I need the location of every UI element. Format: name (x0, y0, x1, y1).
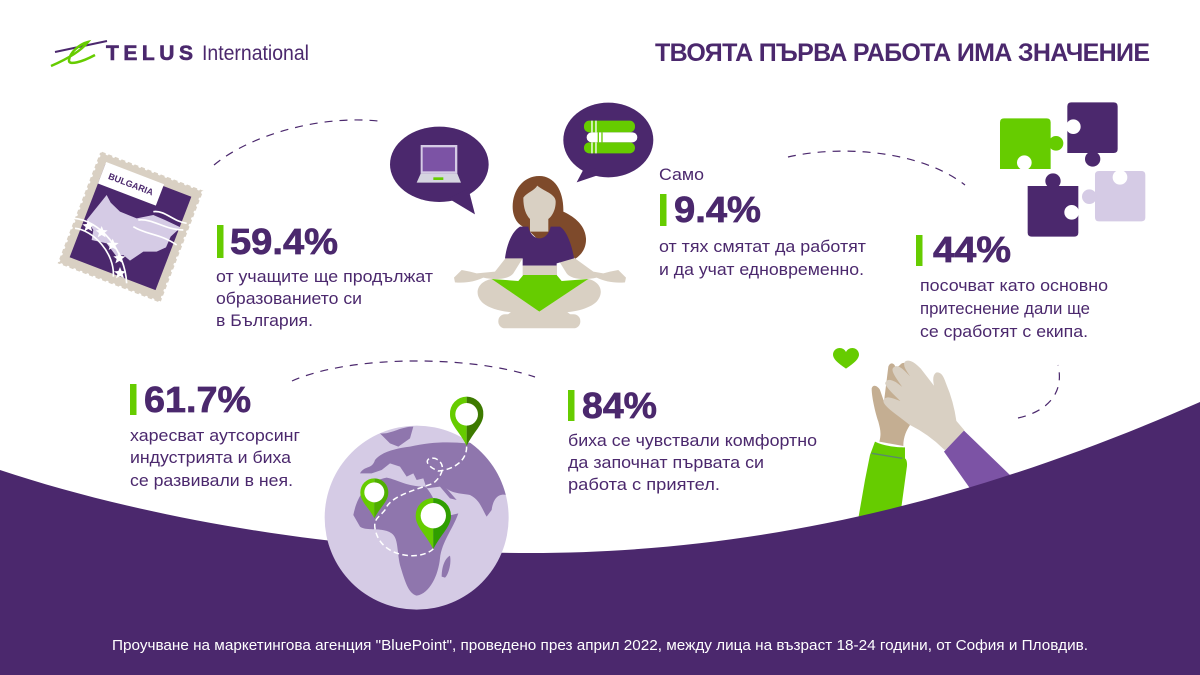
dark piece top (1067, 102, 1118, 167)
dashed connector: stamp to woman (214, 120, 378, 165)
stat: 84%: биха се чувствали комфортно (568, 431, 817, 450)
icon: Bulgaria postage stamp (58, 151, 203, 303)
stat: 9.4% (659, 165, 866, 279)
footer source note: Проучване на маркетингова агенция "BluePoint", проведено през април 2022, между лица на възраст 18-24 години, от София и Пловдив. (112, 638, 1088, 654)
stat: 61.7%: харесват аутсорсинг (130, 426, 300, 445)
dark piece bottom (1028, 173, 1078, 237)
speech bubble: books (563, 103, 653, 182)
illustration: high five hands with heart (833, 348, 1012, 518)
pin: top (450, 397, 483, 446)
stat: 61.7% (130, 379, 300, 490)
stat: 59.4%: образованието си (216, 289, 362, 308)
stat: 59.4%: от учащите ще продължат (216, 267, 433, 286)
icon: puzzle pieces (1000, 102, 1145, 237)
stat: 61.7%: индустрията и биха (130, 448, 292, 467)
stat: 44% (916, 229, 1108, 341)
stat: 59.4%: в България. (216, 311, 313, 330)
stat: 59.4%: 59.4% (230, 221, 338, 262)
purple sleeve (944, 431, 1012, 488)
stat: 59.4% (216, 221, 433, 330)
stat: 9.4%: от тях смятат да работят (659, 237, 866, 256)
stat: 9.4%: и да учат едновременно. (659, 260, 864, 279)
shorts (492, 275, 588, 312)
pin: west Africa (360, 478, 388, 518)
stat: 61.7%: се развивали в нея. (130, 471, 293, 490)
dashed connector: books to puzzle (788, 151, 965, 185)
continents (353, 427, 513, 596)
stat: 44%: се сработят с екипа. (920, 322, 1088, 341)
stat: 84% (568, 385, 817, 494)
shirt (505, 227, 574, 266)
title: ТВОЯТА ПЪРВА РАБОТА ИМА ЗНАЧЕНИЕ (655, 39, 1150, 67)
arms (454, 258, 523, 283)
neck and face (523, 186, 556, 232)
logo: TELUS International: International (202, 42, 309, 65)
dashed connector: 44 to hands (1018, 365, 1059, 418)
illustration: globe with location pins (325, 397, 513, 610)
stat: 9.4%: Само (659, 165, 704, 184)
stat: 44%: посочват като основно (920, 276, 1108, 295)
speech bubble: laptop (390, 127, 489, 214)
stat: 44%: 44% (933, 229, 1011, 270)
front hand (885, 362, 963, 448)
hair (513, 176, 586, 263)
green piece (1000, 118, 1063, 169)
stat: 9.4%: 9.4% (674, 189, 761, 230)
logo: TELUS International (51, 41, 309, 66)
background wave (0, 402, 1200, 675)
pin: east Africa (416, 498, 451, 549)
route dashed (375, 447, 467, 556)
lilac piece (1082, 171, 1145, 221)
stat: 84%: 84% (582, 385, 657, 426)
illustration: meditating woman with speech bubbles (390, 103, 653, 328)
waist (523, 266, 557, 276)
legs (478, 279, 601, 313)
icon: Bulgaria postage stamp: BULGARIA (107, 171, 155, 198)
stat: 84%: работа с приятел. (568, 475, 720, 494)
green sleeve (858, 442, 907, 518)
stat: 84%: да започнат първата си (568, 453, 764, 472)
dashed connector: 61.7 to 84 (292, 361, 535, 381)
logo: TELUS International: TELUS (106, 42, 193, 65)
back hand (872, 363, 920, 446)
heart (833, 348, 859, 369)
stat: 61.7%: 61.7% (144, 379, 251, 420)
stat: 44%: притеснение дали ще (920, 299, 1090, 318)
